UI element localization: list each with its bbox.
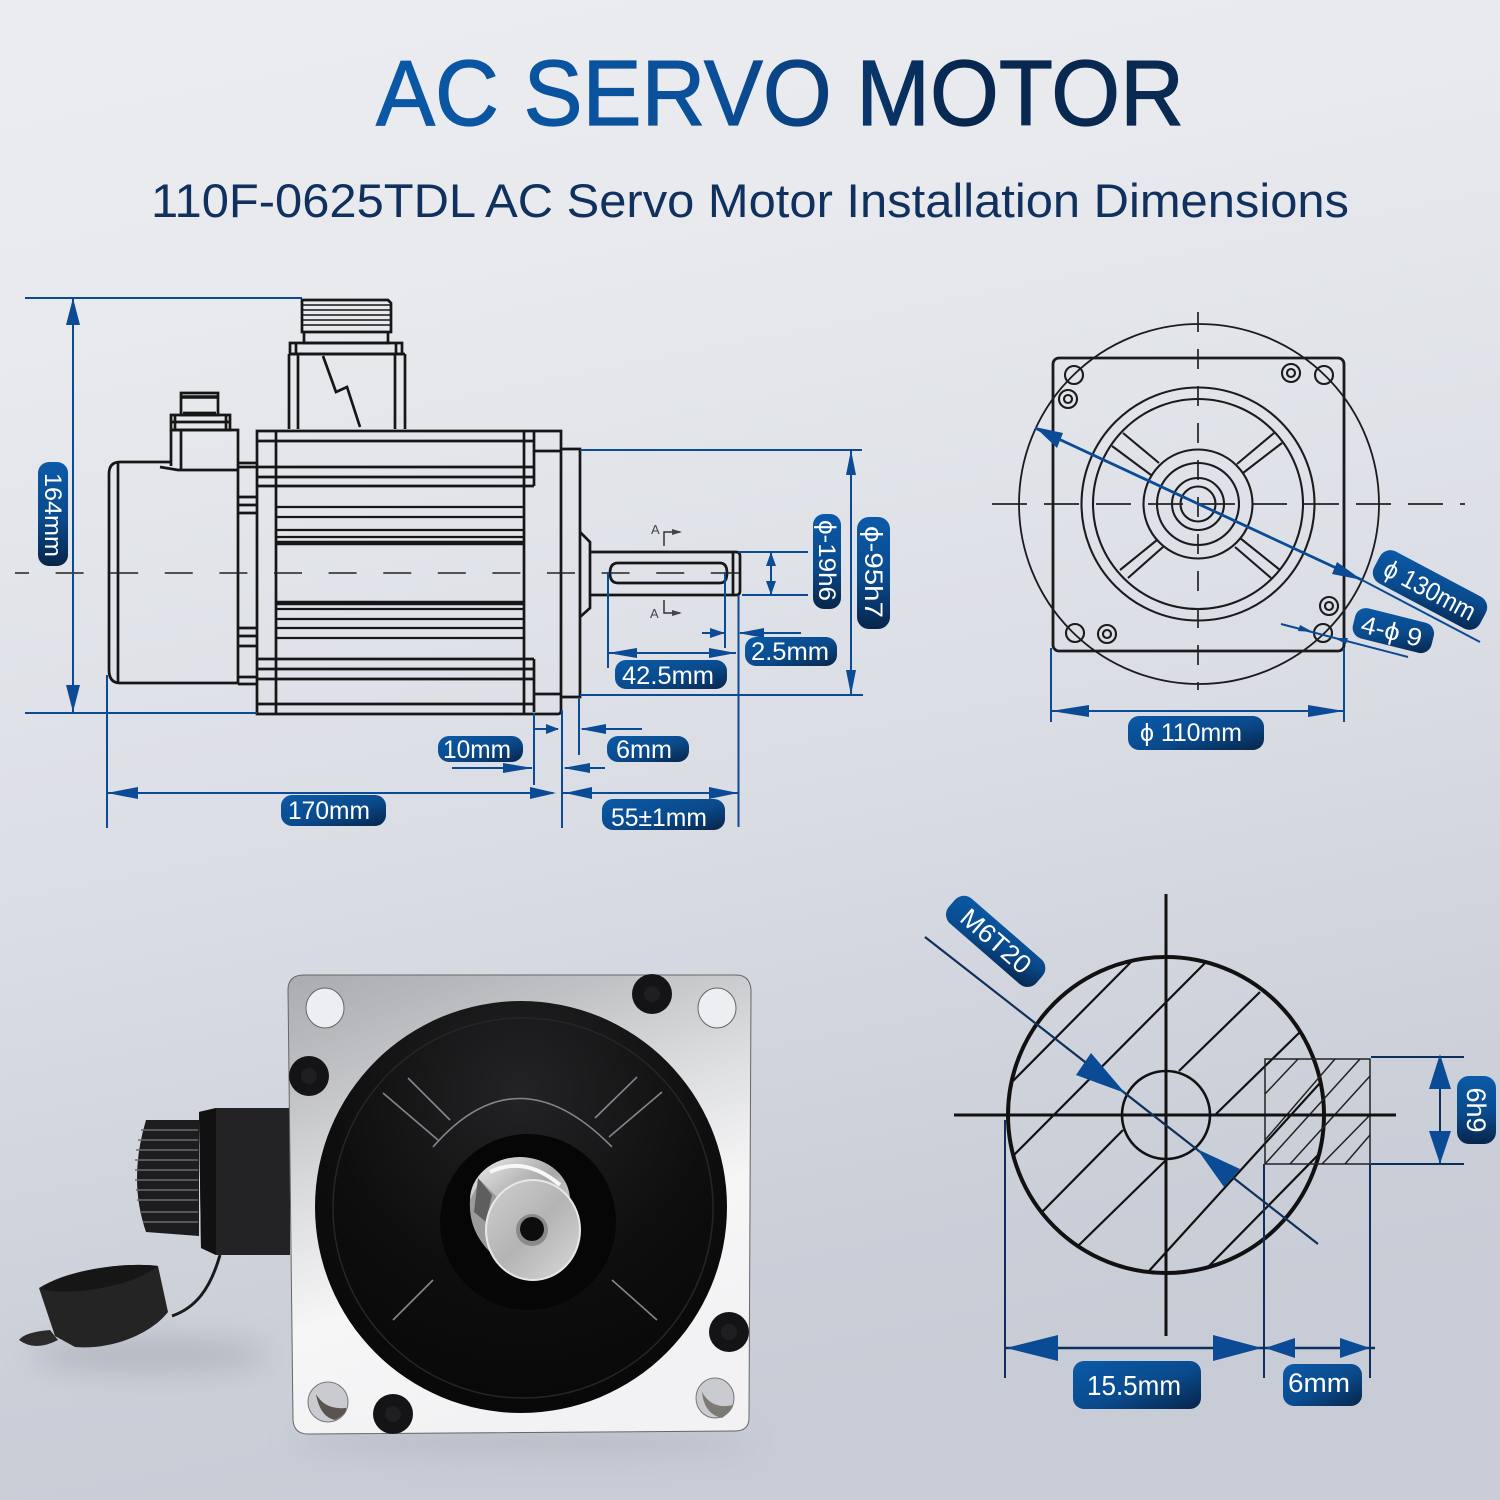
flange square: [1053, 358, 1344, 651]
label: phi 19h6: ϕ-19h6: [813, 520, 840, 601]
label: 55±1mm: 55±1mm: [611, 804, 707, 832]
label: 42.5mm: 42.5mm: [622, 662, 714, 690]
label: 6h9: [1457, 1076, 1496, 1144]
label: 4-phi 9: [1350, 606, 1436, 655]
label: 164mm: [38, 462, 68, 566]
label: phi 95h7: ϕ-95h7: [859, 526, 887, 618]
screws: [1059, 390, 1077, 408]
label: 164mm: 164mm: [39, 473, 66, 557]
label: 6mm (section): [1283, 1364, 1362, 1406]
front-view dimension lines: [1035, 428, 1480, 722]
label: phi 110mm: [1128, 716, 1264, 750]
connector housing: [199, 1108, 290, 1255]
connector thread: [135, 1120, 199, 1236]
centre line: [15, 572, 740, 574]
label: 170mm: 170mm: [288, 797, 370, 825]
black end-cap disc: [315, 1001, 727, 1413]
subtitle: 110F-0625TDL AC Servo Motor Installation Dimensions: [151, 174, 1349, 227]
leader M6T20: [925, 937, 1318, 1244]
label: phi 110mm: ϕ 110mm: [1140, 719, 1242, 747]
label: 6mm: 6mm: [616, 736, 672, 764]
encoder connector: [171, 393, 238, 469]
label: 4-phi 9: 4-ϕ 9: [1358, 611, 1425, 653]
front-view centre lines: [992, 503, 1465, 505]
steel shaft: [470, 1157, 580, 1280]
front-view arrowheads: [1035, 427, 1362, 717]
side-view dimension lines: [25, 298, 863, 828]
label: 15.5mm: 15.5mm: [1087, 1370, 1181, 1401]
motor body: [257, 431, 561, 714]
cap screws: [289, 974, 749, 1434]
corner holes: [1065, 366, 1083, 384]
label: 6h9: 6h9: [1461, 1087, 1491, 1133]
steel plate: [288, 975, 751, 1434]
side-view arrowheads: [66, 298, 856, 799]
label: 10mm: 10mm: [443, 736, 511, 764]
rings and hub: [1082, 388, 1314, 620]
motor side-view drawing: [109, 300, 740, 714]
centre axes: [954, 894, 1396, 1336]
section mark A: [650, 522, 682, 621]
label: 15.5mm: [1073, 1361, 1201, 1409]
output shaft: [590, 552, 740, 595]
label: phi 130mm: ϕ 130mm: [1379, 553, 1481, 627]
corner holes: [306, 988, 736, 1422]
label: 2.5mm: 2.5mm: [751, 638, 829, 666]
section mark A: A: [651, 522, 660, 537]
cap ribs: [383, 1077, 662, 1320]
section circle with hatch: [1008, 957, 1324, 1273]
encoder body: [109, 462, 257, 684]
label: 6mm: [607, 736, 689, 764]
label: M6T20: [941, 891, 1050, 992]
mounting flange: [534, 449, 590, 697]
section dimension lines: [1005, 1056, 1464, 1378]
section arrowheads: [1006, 1054, 1451, 1361]
section mark A: A: [650, 606, 659, 621]
label: 6mm (section): 6mm: [1288, 1368, 1350, 1398]
product photo: motor: [19, 974, 751, 1452]
label: 55±1mm: [602, 799, 725, 832]
spokes: [1112, 433, 1282, 578]
label: M6T20: M6T20: [954, 902, 1038, 980]
top power connector: [289, 300, 405, 429]
outer bolt circle: [1019, 324, 1379, 684]
dust cap: [19, 1265, 168, 1347]
shadows: [30, 1337, 750, 1452]
title: AC SERVO MOTOR: [376, 41, 1184, 145]
keyway hatch box: [1265, 1059, 1370, 1164]
motor front-view drawing: [1019, 324, 1379, 684]
strap: [172, 1255, 220, 1316]
label: phi 95h7: [857, 517, 890, 629]
shaft cross-section drawing: [925, 891, 1496, 1409]
